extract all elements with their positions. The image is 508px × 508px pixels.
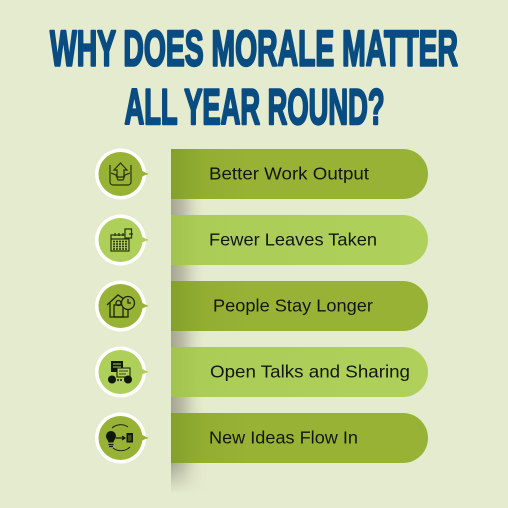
label: People Stay Longer: [213, 296, 373, 316]
badge: [95, 412, 149, 464]
item 5: new ideas flow in: [95, 412, 428, 464]
label: Better Work Output: [209, 164, 369, 184]
pill: [171, 281, 428, 331]
label: Fewer Leaves Taken: [209, 230, 377, 250]
item 4: open talks and sharing: [95, 346, 428, 398]
item 1: better work output: [95, 148, 428, 200]
pill: [171, 347, 428, 397]
badge: [95, 148, 149, 200]
badge: [95, 346, 149, 398]
icon: house with clock and person: [107, 295, 134, 317]
pill: [171, 149, 428, 199]
icon: calendar with exit door: [111, 229, 133, 251]
label: New Ideas Flow In: [209, 428, 358, 448]
pill: [171, 413, 428, 463]
item 3: people stay longer: [95, 280, 428, 332]
pill: [171, 215, 428, 265]
icon: lightbulb to document cycle: [106, 425, 133, 451]
icon: tray with up arrow and gear: [110, 163, 131, 185]
item 2: fewer leaves taken: [95, 214, 428, 266]
pill shadows: [171, 199, 197, 490]
badge: [95, 280, 149, 332]
badge: [95, 214, 149, 266]
icon: chat bubbles and two people: [108, 361, 132, 384]
label: Open Talks and Sharing: [210, 362, 410, 382]
title: [50, 20, 458, 135]
